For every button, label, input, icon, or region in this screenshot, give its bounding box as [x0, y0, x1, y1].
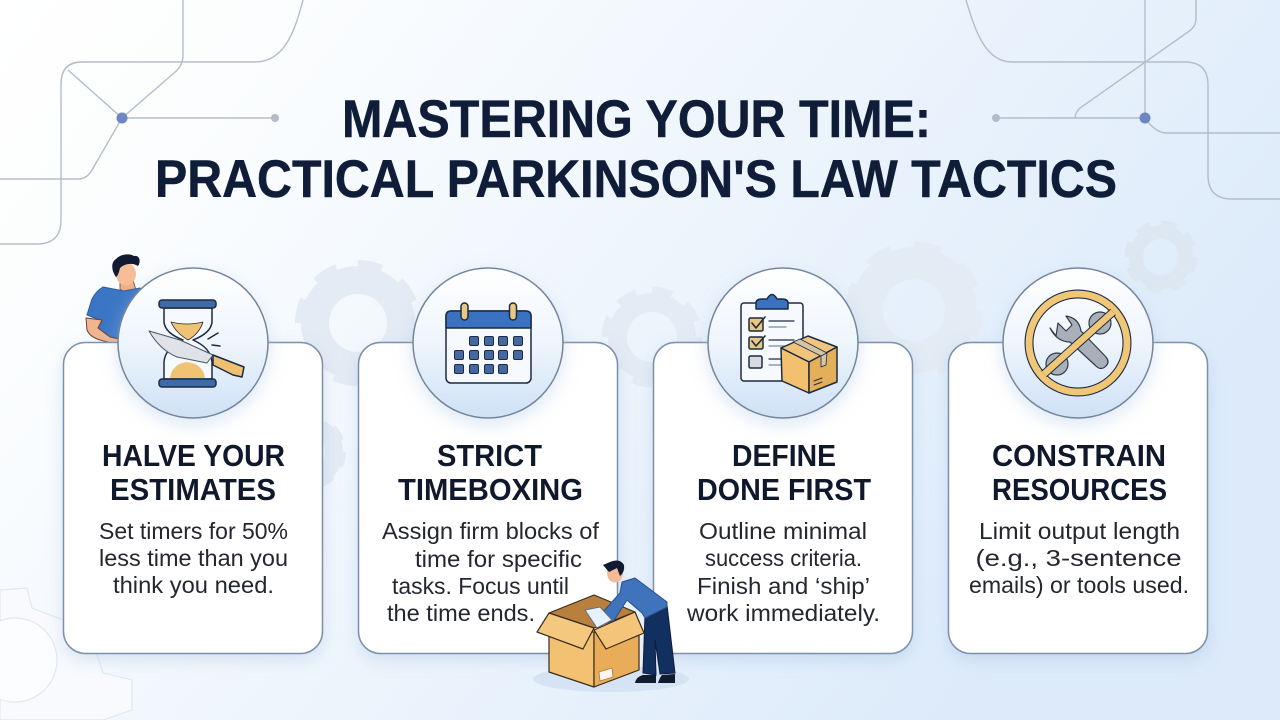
- body text: Finish and ‘ship’: [697, 573, 870, 599]
- gear hole: bottom left: [0, 618, 57, 702]
- box back and inside: [549, 595, 635, 628]
- icon disc: [708, 268, 858, 418]
- body text: emails) or tools used.: [969, 572, 1189, 598]
- icon disc: [118, 268, 268, 418]
- icon: calendar: [446, 303, 531, 383]
- body text: [686, 518, 880, 626]
- heading: [398, 438, 583, 507]
- title: [155, 90, 1117, 209]
- gear: left of card two: [300, 265, 416, 381]
- shirt: [87, 287, 155, 339]
- hair: [112, 254, 140, 277]
- body text: Outline minimal: [699, 518, 867, 544]
- icon disc: [413, 268, 563, 418]
- icon: crossed tools prohibited: [1029, 294, 1127, 392]
- body text: time for specific: [415, 546, 582, 572]
- heading: [992, 438, 1167, 507]
- node end: top left: [271, 114, 279, 122]
- heading: RESOURCES: [992, 472, 1167, 507]
- body text: work immediately.: [686, 600, 880, 626]
- body text: (e.g., 3-sentence: [976, 545, 1182, 571]
- ground shadow: [533, 666, 689, 692]
- heading: DEFINE: [732, 438, 836, 473]
- shirt and arms: [602, 578, 667, 622]
- gear: bottom left outline: [0, 588, 132, 720]
- pants: [643, 605, 675, 675]
- gear: centre: [606, 291, 698, 383]
- icon disc: [1003, 268, 1153, 418]
- body text: Limit output length: [979, 518, 1180, 544]
- heading: CONSTRAIN: [992, 438, 1166, 473]
- node: top right: [1140, 112, 1150, 124]
- box label: [599, 668, 613, 681]
- body text: [99, 518, 288, 598]
- person packing a box: [533, 561, 689, 692]
- panel: halve your estimates: [64, 268, 322, 654]
- body text: less time than you: [99, 545, 288, 571]
- heading: DONE FIRST: [697, 472, 871, 507]
- circuit lines: top left: [0, 0, 303, 244]
- box front: [537, 612, 644, 687]
- hair: [603, 561, 624, 576]
- person leaning on card: [86, 254, 155, 344]
- body text: [969, 518, 1189, 598]
- icon: clipboard and box: [741, 294, 837, 393]
- heading: [102, 438, 285, 507]
- head: [116, 262, 136, 286]
- body text: [382, 518, 600, 626]
- body text: Assign firm blocks of: [382, 518, 600, 544]
- background gears: [273, 224, 1194, 487]
- neck: [120, 280, 136, 293]
- body text: the time ends.: [387, 600, 535, 626]
- panel: define done first: [654, 268, 912, 654]
- title: PRACTICAL PARKINSON'S LAW TACTICS: [155, 150, 1117, 209]
- node: top left: [116, 112, 128, 124]
- shoes: [635, 674, 675, 683]
- gear: behind first card: [273, 417, 343, 487]
- body text: tasks. Focus until: [392, 573, 569, 599]
- title: MASTERING YOUR TIME:: [342, 90, 931, 149]
- heading: STRICT: [437, 438, 542, 473]
- body text: think you need.: [113, 572, 274, 598]
- gear: upper right: [1128, 224, 1194, 290]
- icon: hourglass and knife: [149, 300, 244, 387]
- circuit lines: top right: [966, 0, 1280, 199]
- body text: success criteria.: [705, 545, 862, 571]
- heading: HALVE YOUR: [102, 438, 285, 473]
- heading: [697, 438, 871, 507]
- gear: large right: [851, 247, 977, 373]
- body text: Set timers for 50%: [99, 518, 288, 544]
- node end: top right: [992, 114, 1000, 122]
- panel: constrain resources: [948, 268, 1208, 654]
- heading: TIMEBOXING: [398, 472, 583, 507]
- head: [607, 564, 623, 582]
- panel: strict timeboxing: [358, 268, 618, 654]
- heading: ESTIMATES: [110, 472, 276, 507]
- paper: [585, 607, 612, 628]
- arm: [86, 318, 123, 344]
